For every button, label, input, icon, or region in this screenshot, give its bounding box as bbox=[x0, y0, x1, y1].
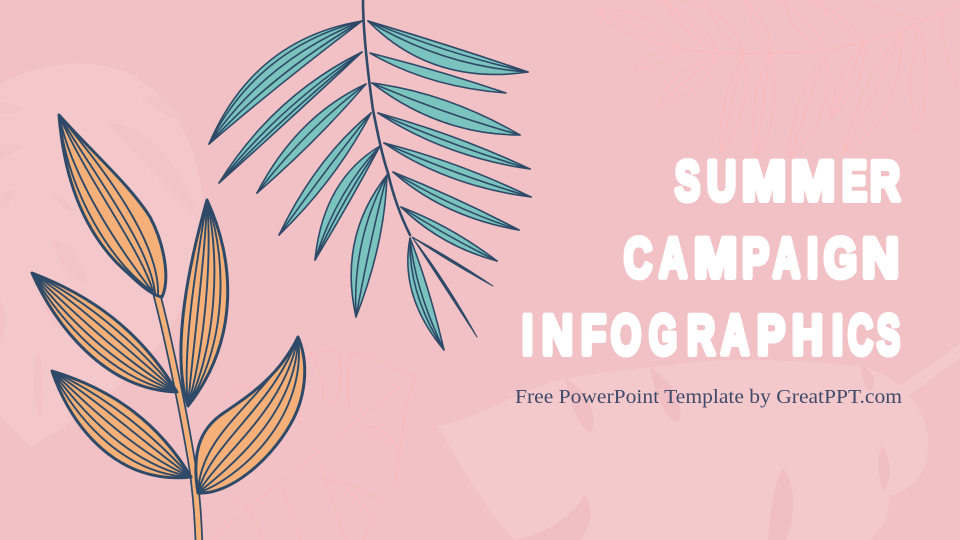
title line: infographics: C bbox=[848, 303, 873, 366]
leaf: orange upright bbox=[181, 200, 228, 406]
background monstera silhouette: right bbox=[437, 344, 960, 540]
title bbox=[522, 149, 900, 366]
title line: summer: S bbox=[675, 149, 700, 212]
title line: infographics: O bbox=[611, 303, 641, 366]
title line: campaign: A bbox=[659, 226, 687, 289]
title line: summer: E bbox=[842, 149, 867, 212]
leaf: orange middle left bbox=[32, 273, 177, 392]
background outline monstera leaf bbox=[213, 351, 417, 540]
leaf: orange lower left bbox=[52, 371, 191, 478]
leaf: orange lower right bbox=[196, 337, 305, 493]
title line: campaign: C bbox=[624, 226, 652, 289]
title line: campaign: M bbox=[694, 226, 737, 289]
illustration: teal palm frond bbox=[209, 0, 531, 350]
title line: campaign: G bbox=[824, 226, 857, 289]
title line: campaign: N bbox=[862, 226, 899, 289]
branch stem bbox=[157, 295, 199, 540]
title line: infographics: F bbox=[581, 303, 606, 366]
subtitle: Free PowerPoint Template by GreatPPT.com bbox=[515, 386, 902, 408]
title line: campaign: A bbox=[773, 226, 800, 289]
frond stem bbox=[363, 0, 410, 235]
title line: infographics: N bbox=[542, 303, 573, 366]
title line: infographics: H bbox=[792, 303, 823, 366]
title line: infographics: I bbox=[832, 303, 843, 366]
leaf: orange top bbox=[59, 115, 166, 297]
title line: summer: R bbox=[870, 149, 900, 212]
title line: infographics: S bbox=[877, 303, 900, 366]
bottom leaflets bbox=[408, 237, 493, 350]
title line: infographics: G bbox=[649, 303, 677, 366]
illustration: orange leaf branch bbox=[32, 115, 305, 540]
title line: summer: M bbox=[742, 149, 786, 212]
title line: summer: U bbox=[707, 149, 736, 212]
title line: infographics: I bbox=[522, 303, 533, 366]
title line: campaign: I bbox=[807, 226, 818, 289]
title line: infographics: P bbox=[757, 303, 785, 366]
background monstera silhouette: left bbox=[0, 64, 203, 447]
left leaflets bbox=[209, 21, 387, 317]
right leaflets bbox=[368, 21, 531, 261]
title line: summer: M bbox=[791, 149, 835, 212]
title line: infographics: R bbox=[687, 303, 715, 366]
title line: campaign: P bbox=[742, 226, 769, 289]
background outline fern branch bbox=[595, 0, 960, 157]
title line: infographics: A bbox=[721, 303, 749, 366]
